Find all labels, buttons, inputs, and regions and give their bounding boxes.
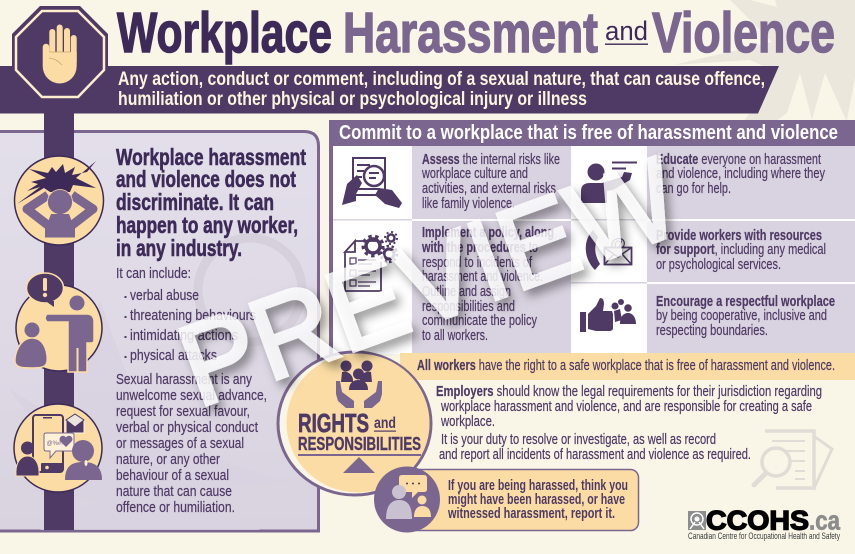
title — [117, 1, 835, 65]
callout: report it: might have been harassed, or have — [448, 491, 625, 508]
callout: report it: If you are being harassed, think you — [448, 477, 628, 494]
text: sexual harassment definition: verbal or physical conduct — [116, 420, 258, 436]
banner: humiliation or other physical or psychological injury or illness — [118, 88, 587, 110]
badge: rights and responsibilities: RIGHTS — [298, 408, 369, 438]
badge: rights and responsibilities: RESPONSIBILITIES — [298, 433, 421, 454]
text: implement: to all workers. — [422, 328, 488, 344]
decorative starburst top right — [673, 0, 855, 122]
text: educate — [656, 152, 826, 197]
text: sexual harassment definition: nature that can cause — [116, 484, 232, 500]
text: sexual harassment definition — [116, 372, 267, 516]
heading: does not discriminate: happen to any worker, — [116, 212, 298, 238]
text: employers: workplace. — [440, 414, 495, 430]
text: implement — [421, 225, 554, 344]
list: it can include: physical attacks — [130, 348, 217, 364]
text: sexual harassment definition: offence or humiliation. — [116, 500, 235, 516]
text: implement: with the procedures to — [421, 240, 538, 256]
callout: report it — [374, 466, 638, 532]
badge: rights and responsibilities — [278, 352, 431, 495]
list: it can include: It can include: — [116, 266, 191, 282]
text: educate: can go for help. — [656, 181, 731, 197]
faint background burst — [8, 300, 290, 530]
panel: commit to a workplace — [329, 120, 855, 356]
icon: people in hands — [336, 360, 382, 408]
logo: CCOHS: .ca — [809, 506, 841, 536]
text: sexual harassment definition: nature, or any other — [116, 452, 220, 468]
list: it can include: threatening behaviours — [130, 308, 256, 324]
text: assess: like family violence. — [422, 196, 515, 212]
icon: educate — [581, 162, 637, 203]
text: implement: harassment and violence. — [422, 269, 543, 285]
list: it can include: verbal abuse — [130, 288, 199, 304]
text: employers: and report all incidents of harassment and violence as required. — [439, 447, 751, 463]
heading: does not discriminate: Workplace harassment — [116, 144, 306, 170]
text: implement: Outline and assign — [422, 284, 511, 300]
icon: document search — [754, 431, 832, 488]
icon: resources: @ — [610, 236, 626, 253]
logo: CCOHS — [688, 506, 841, 541]
watermark: PREVIEW: PREVIEW — [162, 131, 696, 431]
callout: report it: witnessed harassment, report it. — [447, 505, 615, 522]
text: provide: or psychological services. — [656, 257, 781, 273]
text: employers — [436, 384, 822, 463]
title: Harassment — [343, 1, 598, 65]
icon: online harassment — [14, 404, 102, 492]
text: encourage — [656, 294, 835, 339]
list: it can include — [116, 266, 256, 364]
rights bar — [400, 353, 855, 380]
text: assess: activities, and external risks — [422, 181, 556, 197]
text: sexual harassment definition: Sexual harassment is any — [116, 372, 253, 388]
faint logo ring — [198, 238, 302, 342]
heading: does not discriminate: in any industry. — [116, 235, 242, 261]
icon: policy — [345, 232, 397, 291]
icon: respect — [580, 298, 636, 332]
heading: does not discriminate: and violence does not — [116, 166, 296, 192]
list: it can include: intimidating actions — [130, 328, 238, 344]
icon: threatening person — [15, 273, 102, 372]
icon: resources — [586, 230, 632, 270]
text: encourage: respecting boundaries. — [656, 323, 768, 339]
logo: CCOHS: CCOHS — [706, 506, 809, 536]
icon: assess — [342, 158, 402, 208]
text: implement: communicate the policy — [422, 313, 538, 329]
icon: online harassment: @%#! — [46, 441, 63, 447]
text: assess: Assess the internal risks like — [422, 152, 560, 168]
text: implement: Implement a policy, along — [422, 225, 554, 241]
text: assess — [421, 152, 560, 212]
text: implement: responsibilities and — [422, 299, 515, 315]
panel: who it affects — [0, 113, 318, 531]
title: Workplace — [117, 1, 332, 65]
heading: does not discriminate: discriminate. It can — [116, 189, 274, 215]
heading: does not discriminate — [116, 144, 306, 261]
text: employers: It is your duty to resolve or investigate, as well as record — [441, 432, 716, 448]
icon: people talking — [374, 466, 440, 532]
text: provide — [656, 228, 826, 273]
text: assess: workplace culture and — [421, 166, 528, 182]
text: sexual harassment definition: or messages of a sexual — [116, 436, 244, 452]
badge: rights and responsibilities: and — [374, 415, 396, 432]
banner — [0, 66, 779, 114]
text: implement: respond to incidents of — [422, 255, 533, 271]
title: and — [605, 16, 648, 46]
icon: stressed person — [14, 156, 104, 245]
icon: stop sign with hand — [12, 6, 108, 99]
text: sexual harassment definition: request for sexual favour, — [116, 404, 250, 420]
vertical strip — [44, 113, 74, 530]
text: sexual harassment definition: unwelcome sexual advance, — [116, 388, 267, 404]
text: sexual harassment definition: behaviour of a sexual — [116, 468, 229, 484]
